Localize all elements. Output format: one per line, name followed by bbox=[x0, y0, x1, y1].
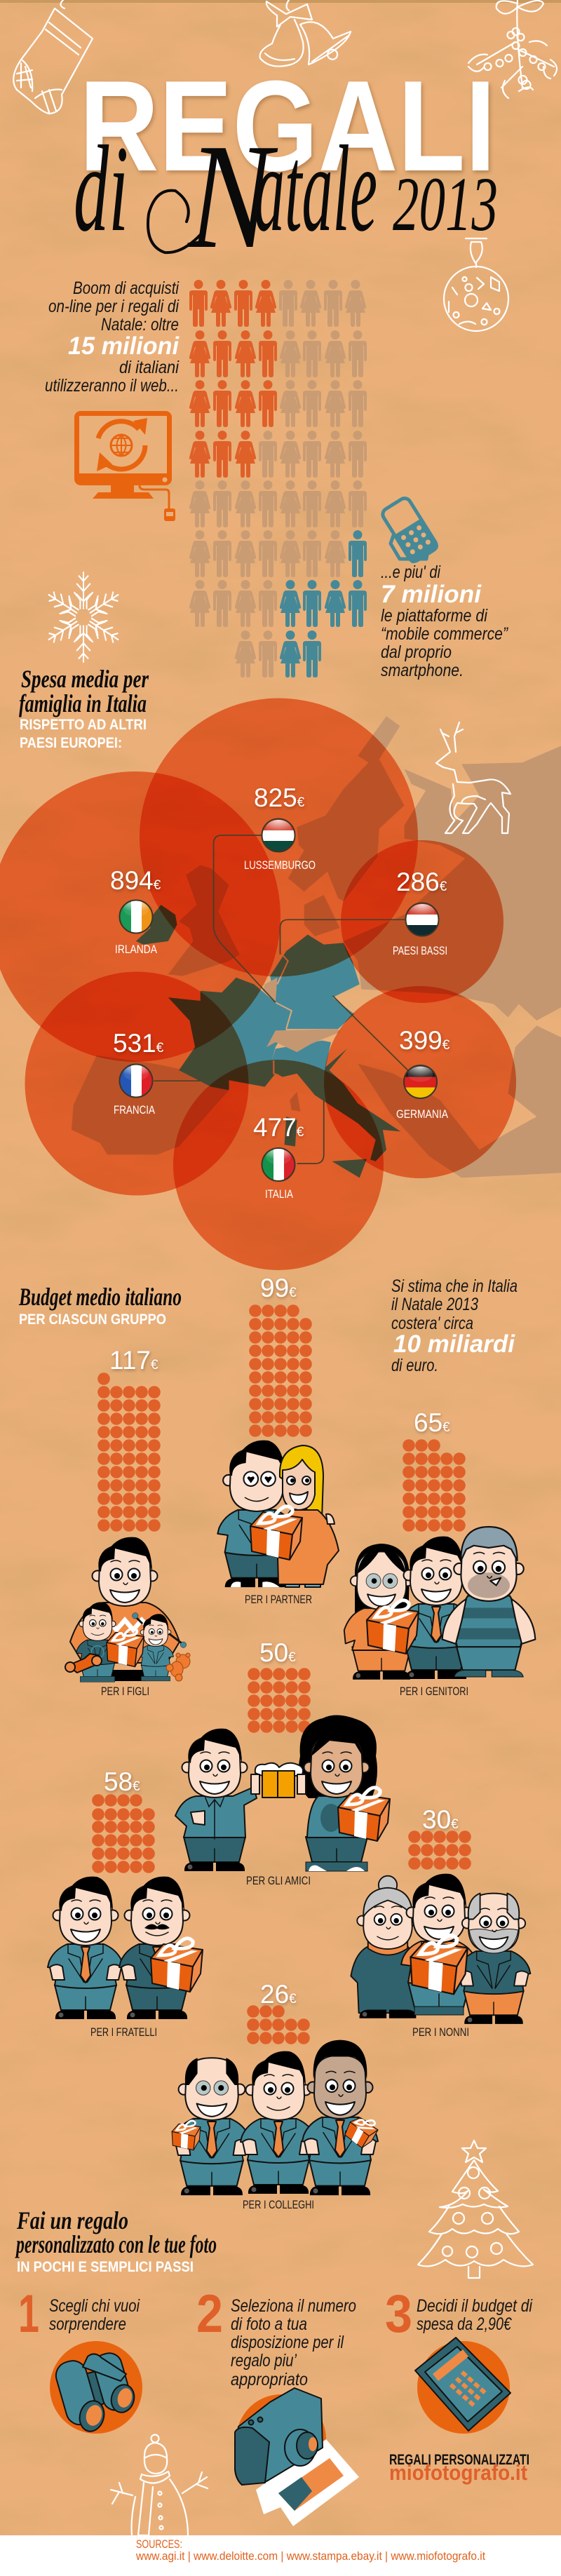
step 2 bbox=[196, 2284, 359, 2526]
circle: Francia bbox=[25, 972, 248, 1195]
dot chart: genitori 65: 65€ bbox=[414, 1408, 450, 1437]
bald colleague bbox=[173, 2058, 250, 2195]
circle: Germania bbox=[324, 986, 516, 1178]
brand: miofotografo bbox=[389, 2452, 529, 2485]
dot chart: amici 50: 50€ bbox=[259, 1638, 296, 1667]
pictogram: people grid bbox=[189, 280, 367, 677]
teddy bear bbox=[166, 1653, 190, 1681]
icon: calculator bbox=[415, 2338, 511, 2434]
step 2: regalo piu’ bbox=[231, 2351, 297, 2371]
country: Germania: GERMANIA bbox=[396, 1107, 449, 1121]
text: 7 milioni mobile commerce: le piattaforme di bbox=[381, 606, 488, 626]
grandmother bbox=[351, 1876, 419, 2018]
flag: Lussemburgo bbox=[262, 818, 295, 852]
father with sweater bbox=[70, 1537, 180, 1681]
daughter bbox=[133, 1613, 187, 1681]
country: Italia: ITALIA bbox=[265, 1187, 294, 1201]
step 1: 1 bbox=[18, 2284, 39, 2344]
country: Irlanda bbox=[110, 866, 161, 956]
label: per i fratelli: PER I FRATELLI bbox=[90, 2025, 157, 2039]
step 3: Decidi il budget di bbox=[417, 2296, 533, 2316]
text: 7 milioni mobile commerce: “mobile commerce” bbox=[381, 624, 508, 644]
country: Lussemburgo: € bbox=[297, 795, 305, 810]
web users row 3 bbox=[189, 380, 277, 427]
title: di Natale 2013: di bbox=[74, 121, 128, 257]
older man bbox=[442, 1527, 535, 1677]
characters: nonni bbox=[351, 1874, 530, 2039]
icon: reindeer bbox=[436, 722, 511, 833]
man in love bbox=[217, 1441, 296, 1587]
step 3 bbox=[385, 2284, 533, 2434]
map: Balkans and Turkey bbox=[358, 1025, 561, 1178]
text: 15 milioni web users bbox=[45, 278, 180, 396]
text: 15 milioni web users: utilizzeranno il web... bbox=[45, 376, 179, 396]
heading: budget medio: Budget medio italiano bbox=[18, 1283, 182, 1311]
heading: budget medio bbox=[18, 1283, 182, 1328]
map circles bbox=[0, 699, 516, 1270]
text: 10 miliardi: di euro. bbox=[391, 1356, 438, 1375]
heading: fai un regalo: IN POCHI E SEMPLICI PASSI bbox=[17, 2259, 194, 2275]
country: Germania bbox=[396, 1026, 450, 1121]
friend with beer bbox=[175, 1729, 257, 1871]
icon: mistletoe bbox=[468, 0, 557, 98]
characters: genitori bbox=[344, 1527, 535, 1698]
map: northern and eastern Europe bbox=[288, 716, 561, 1020]
step 2: disposizione per il bbox=[231, 2333, 344, 2352]
icon: snowman bbox=[111, 2435, 208, 2535]
circle: Lussemburgo bbox=[140, 699, 418, 976]
circle: Italia bbox=[173, 1060, 384, 1270]
sources bbox=[135, 2537, 485, 2563]
step 2: Seleziona il numero bbox=[231, 2296, 356, 2316]
characters: fratelli bbox=[48, 1877, 203, 2039]
step 2: 2 bbox=[196, 2284, 223, 2344]
text: 15 milioni web users: Boom di acquisti bbox=[73, 278, 180, 298]
text: 15 milioni web users: di italiani bbox=[119, 358, 180, 377]
text: 15 milioni web users: on-line per i regali di bbox=[48, 297, 180, 316]
text: 7 milioni mobile commerce: smartphone. bbox=[381, 661, 464, 680]
web users row 1 bbox=[189, 280, 276, 327]
icon: Christmas tree bbox=[418, 2140, 533, 2278]
text: 10 miliardi: il Natale 2013 bbox=[391, 1295, 478, 1314]
country: Lussemburgo: 825 bbox=[254, 783, 297, 812]
country: Paesi Bassi bbox=[393, 872, 447, 955]
icon: binoculars bbox=[50, 2341, 142, 2434]
icon: stocking bbox=[13, 0, 93, 114]
country: Francia: FRANCIA bbox=[114, 1103, 156, 1117]
dot chart: amici 50 bbox=[248, 1638, 311, 1733]
dot chart: genitori 65 bbox=[403, 1408, 466, 1532]
sources: SOURCES: bbox=[136, 2537, 182, 2551]
brand: miofotografo: miofotografo.it bbox=[389, 2460, 527, 2485]
country: Francia: 531€ bbox=[113, 1029, 164, 1058]
text: 7 milioni mobile commerce: dal proprio bbox=[381, 642, 452, 662]
heading: spesa media: PAESI EUROPEI: bbox=[20, 735, 122, 751]
dot chart: partner 99: 99€ bbox=[260, 1274, 297, 1302]
icon: camera and photo bbox=[235, 2388, 359, 2526]
friend with curly hair bbox=[299, 1715, 377, 1871]
brother two with moustache bbox=[119, 1877, 195, 2019]
muted rows 4 to 8 bbox=[189, 431, 367, 677]
text: 15 milioni web users: 15 milioni bbox=[68, 332, 180, 360]
dot chart: colleghi 26 bbox=[247, 1980, 310, 2044]
title: REGALI: REGALI bbox=[79, 53, 496, 198]
middle man bbox=[401, 1874, 477, 2015]
characters: colleghi bbox=[172, 2040, 381, 2211]
characters: amici bbox=[175, 1715, 390, 1887]
circle: Irlanda bbox=[0, 771, 280, 1062]
map: Switzerland and Austria bbox=[263, 978, 340, 1112]
country: Paesi Bassi: 286€ bbox=[396, 868, 447, 896]
muted row 3 bbox=[280, 380, 367, 427]
country: Irlanda: 894€ bbox=[110, 866, 161, 895]
beer mugs bbox=[251, 1763, 306, 1798]
country: Paesi Bassi: PAESI BASSI bbox=[393, 944, 447, 957]
step 3: 3 bbox=[385, 2284, 412, 2344]
title: di Natale 2013: N bbox=[187, 112, 278, 280]
step 1: sorprendere bbox=[49, 2314, 126, 2334]
flag: Italia bbox=[262, 1147, 295, 1181]
text: 10 miliardi: 10 miliardi bbox=[393, 1330, 515, 1358]
text: 15 milioni web users: Natale: oltre bbox=[101, 315, 179, 335]
map: Germany bbox=[270, 935, 360, 1029]
dot chart: figli 117: 117€ bbox=[109, 1346, 158, 1375]
mother bbox=[344, 1544, 419, 1680]
map of Europe bbox=[72, 716, 561, 1178]
step 1 bbox=[18, 2284, 142, 2434]
text: 10 miliardi: costera' circa bbox=[391, 1314, 473, 1333]
heading: spesa media: Spesa media per bbox=[21, 665, 149, 693]
label: per i genitori: PER I GENITORI bbox=[400, 1685, 468, 1698]
title: di Natale 2013 bbox=[74, 112, 498, 280]
grandfather bbox=[457, 1894, 530, 2024]
country: Irlanda: IRLANDA bbox=[115, 943, 158, 956]
muted row 2 bbox=[280, 330, 367, 377]
map: France bbox=[168, 978, 292, 1090]
dot chart: fratelli 58 bbox=[92, 1767, 155, 1873]
flag: Paesi Bassi bbox=[405, 903, 439, 936]
dot chart: nonni 30 bbox=[408, 1805, 471, 1870]
dot chart: figli 117 bbox=[97, 1346, 161, 1532]
icon: ornament bbox=[444, 238, 508, 331]
middle colleague bbox=[241, 2051, 316, 2194]
dark-skinned colleague bbox=[302, 2040, 378, 2195]
icon: bells bbox=[260, 0, 351, 67]
brother one bbox=[48, 1877, 123, 2019]
text: 7 milioni mobile commerce: ...e piu' di bbox=[381, 562, 441, 582]
map: Ireland bbox=[136, 905, 177, 945]
map: Spain bbox=[72, 1056, 229, 1154]
dot chart: colleghi 26: 26€ bbox=[260, 1980, 297, 2009]
father bbox=[398, 1537, 474, 1679]
circle: Paesi Bassi bbox=[341, 840, 503, 1003]
title bbox=[74, 53, 498, 280]
dot chart: fratelli 58: 58€ bbox=[104, 1767, 140, 1796]
country: Lussemburgo bbox=[245, 788, 316, 869]
label: per i nonni: PER I NONNI bbox=[412, 2025, 469, 2039]
map: Italy bbox=[272, 1041, 400, 1178]
step 2: di foto a tua bbox=[231, 2314, 307, 2334]
title: di Natale 2013: atale bbox=[254, 121, 377, 257]
step 3: spesa da 2,90€ bbox=[417, 2314, 512, 2334]
characters: figli bbox=[65, 1537, 190, 1698]
text: 7 milioni mobile commerce bbox=[381, 562, 508, 680]
flag: Irlanda bbox=[119, 900, 153, 933]
text: 10 miliardi bbox=[391, 1276, 518, 1375]
country: Italia bbox=[253, 1113, 304, 1201]
blonde woman bbox=[276, 1445, 339, 1587]
label: per gli amici: PER GLI AMICI bbox=[246, 1874, 311, 1887]
step 2: appropriato bbox=[231, 2370, 308, 2389]
muted row 1 bbox=[279, 280, 366, 327]
text: 7 milioni mobile commerce: 7 milioni bbox=[381, 581, 482, 608]
label: per i figli: PER I FIGLI bbox=[101, 1685, 149, 1698]
country: Italia: 477€ bbox=[253, 1113, 304, 1142]
label: per i colleghi: PER I COLLEGHI bbox=[243, 2198, 314, 2211]
web users row 4 bbox=[189, 431, 256, 478]
flag: Germania bbox=[404, 1065, 438, 1098]
dot chart: partner 99 bbox=[249, 1274, 312, 1437]
heading: fai un regalo: personalizzato con le tue foto bbox=[15, 2230, 217, 2258]
heading: spesa media bbox=[19, 665, 149, 751]
country: Francia bbox=[114, 1034, 164, 1114]
text: 10 miliardi: Si stima che in Italia bbox=[391, 1276, 518, 1296]
icon: snowflake bbox=[44, 572, 123, 662]
map: Britain bbox=[168, 865, 340, 976]
toy car bbox=[65, 1654, 102, 1673]
son bbox=[76, 1602, 119, 1682]
web users row 2 bbox=[189, 330, 277, 377]
heading: spesa media: famiglia in Italia bbox=[19, 689, 147, 717]
connector lines bbox=[154, 835, 408, 1164]
flag: Francia bbox=[119, 1064, 153, 1098]
gift bbox=[107, 1628, 144, 1666]
label: per i partner: PER I PARTNER bbox=[245, 1593, 312, 1606]
mobile users bbox=[280, 530, 367, 677]
dot chart: nonni 30: 30€ bbox=[422, 1805, 459, 1834]
heading: fai un regalo: Fai un regalo bbox=[16, 2206, 128, 2234]
heading: spesa media: RISPETTO AD ALTRI bbox=[20, 717, 147, 733]
heading: fai un regalo bbox=[15, 2206, 217, 2275]
step 1: Scegli chi vuoi bbox=[49, 2296, 140, 2316]
heading: budget medio: PER CIASCUN GRUPPO bbox=[19, 1311, 166, 1328]
country: Germania: 399€ bbox=[399, 1026, 450, 1055]
icon: computer monitor bbox=[74, 411, 175, 521]
icon: mobile phone bbox=[379, 495, 440, 565]
country: Lussemburgo: LUSSEMBURGO bbox=[244, 858, 316, 872]
sources: www.agi.it | www.deloitte.com | www.stampa.ebay.it | www.miofotografo.it bbox=[135, 2549, 485, 2563]
characters: partner bbox=[217, 1441, 339, 1606]
title: di Natale 2013: 2013 bbox=[393, 161, 498, 247]
